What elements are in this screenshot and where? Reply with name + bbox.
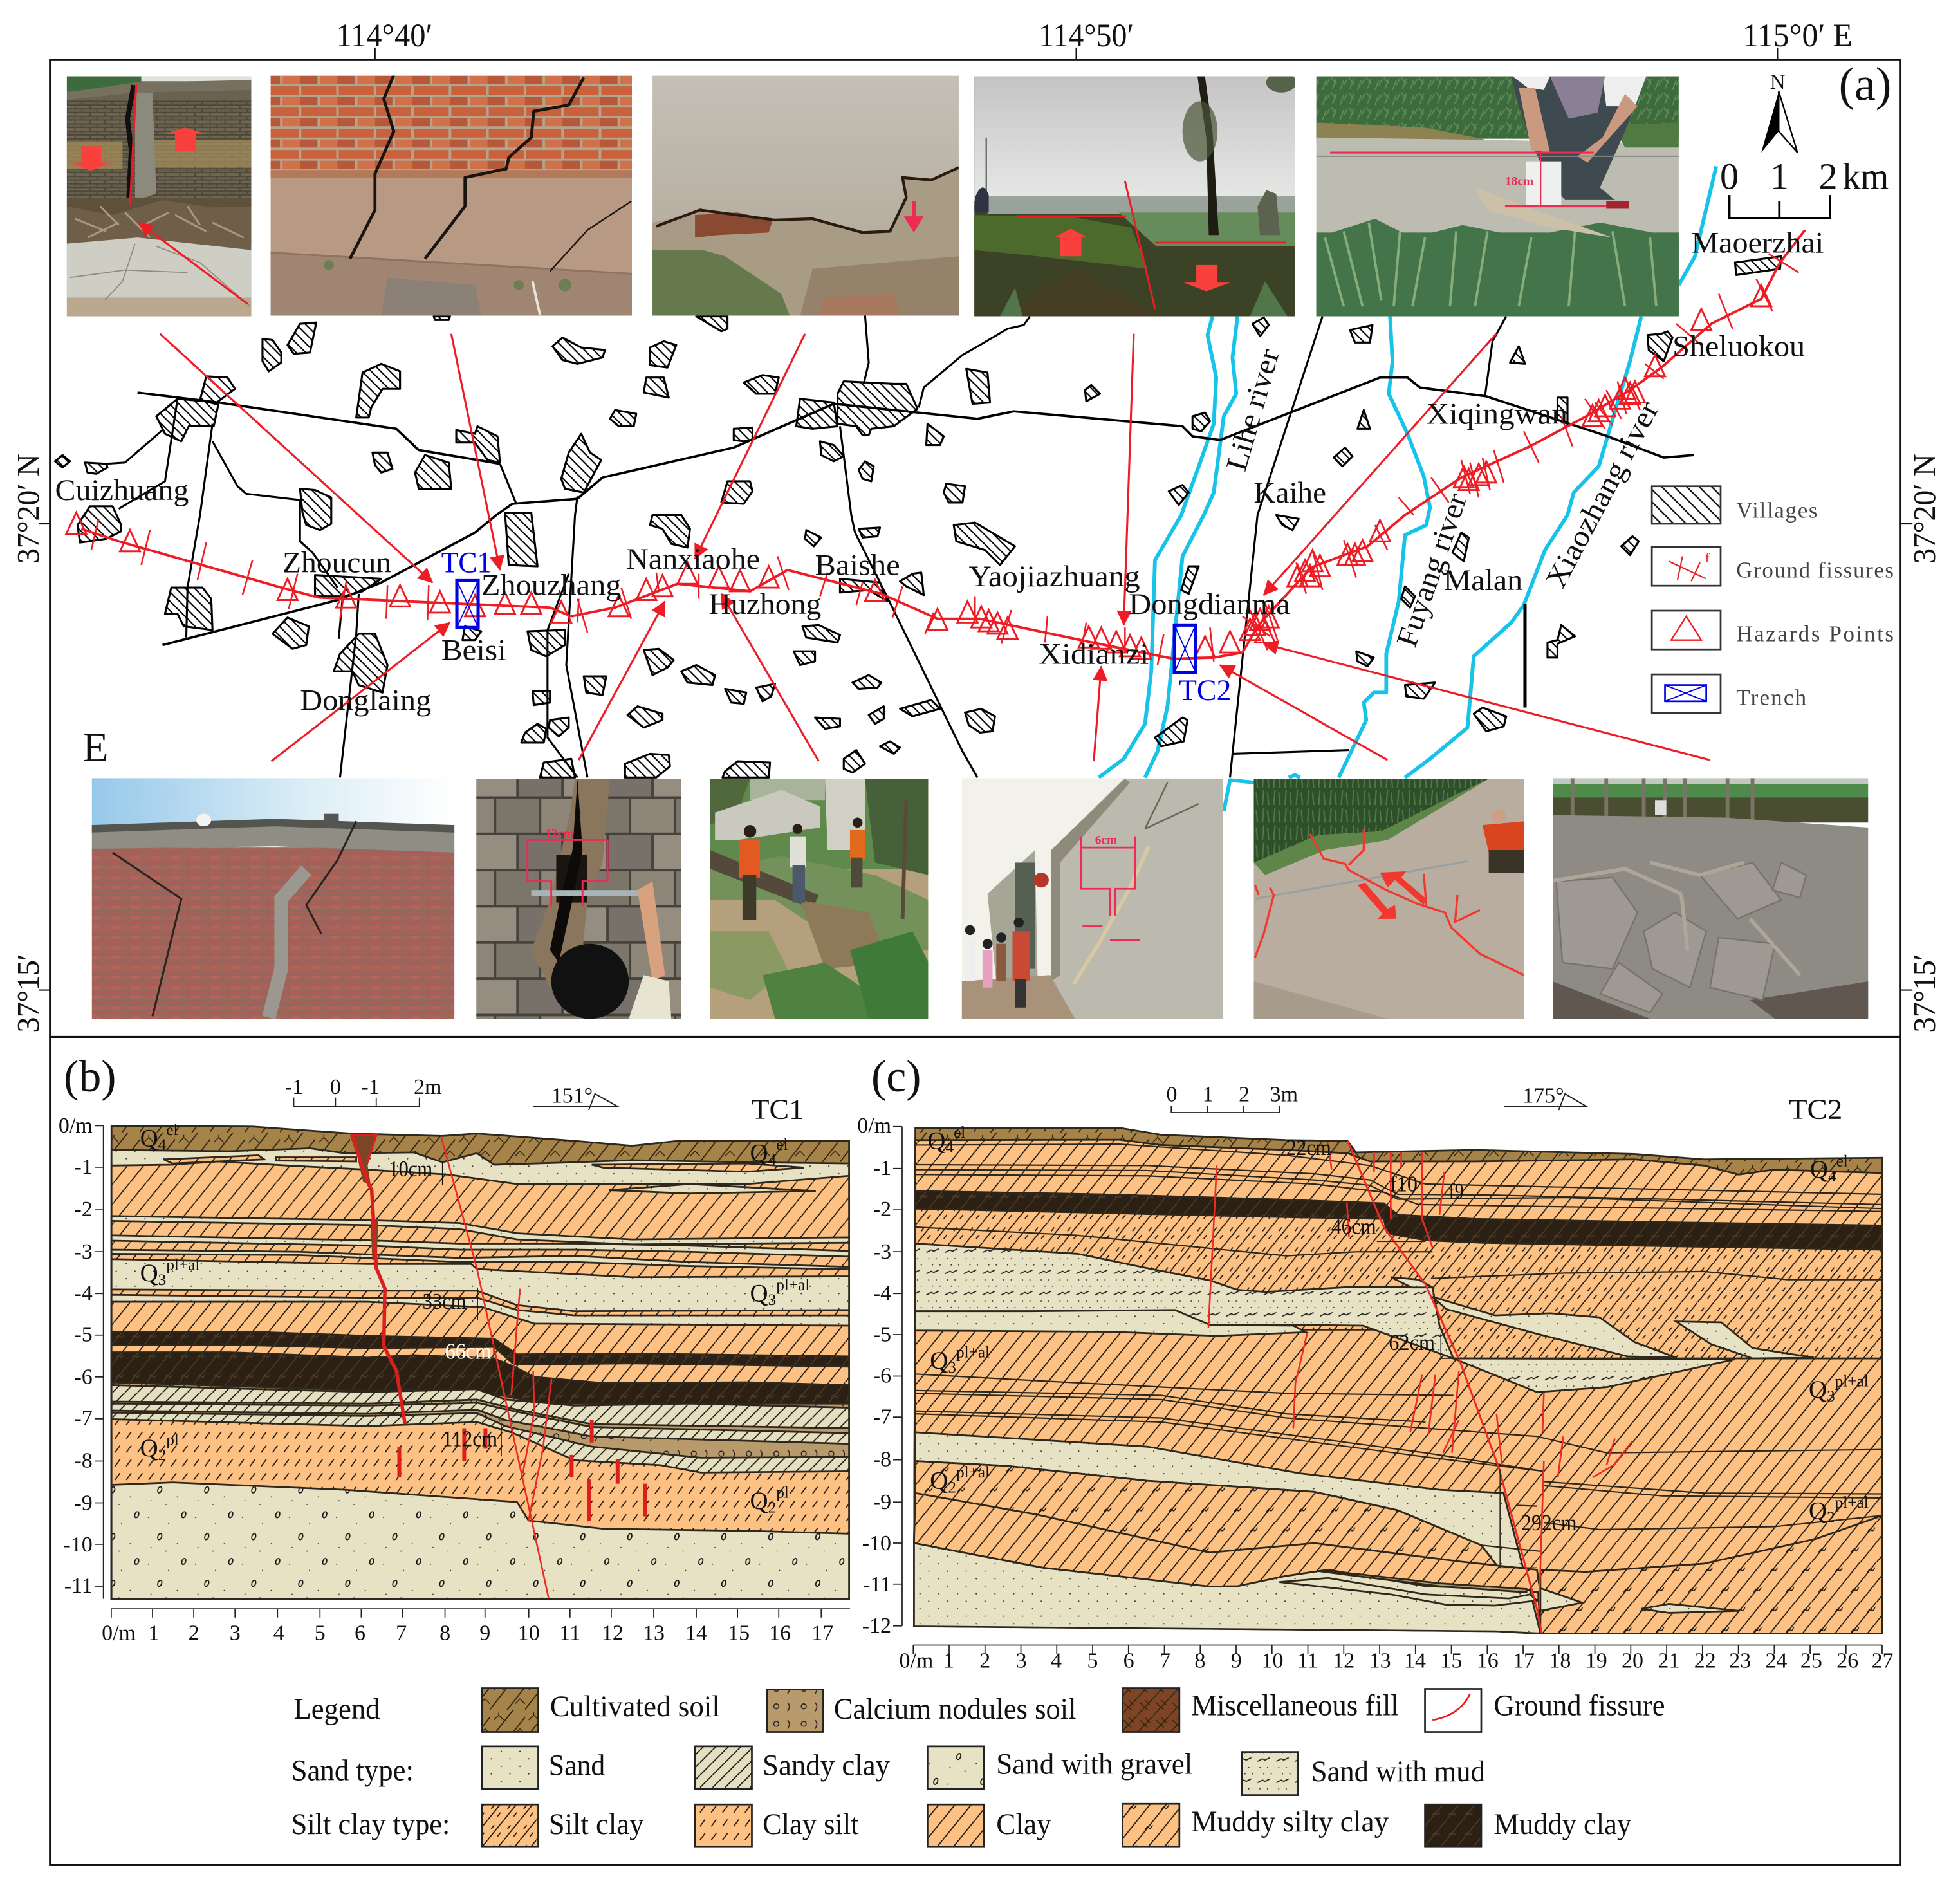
map place labels: Xiaozhang river — [1539, 395, 1666, 593]
longitude label 115°0′ E: 115°0′ E — [1743, 17, 1853, 53]
legend item clay silt: Clay silt — [763, 1808, 859, 1841]
TC1 distance axis: 17 — [811, 1622, 833, 1645]
TC2 distance axis: 16 — [1477, 1649, 1499, 1672]
TC1 scale bar: -1 — [361, 1075, 380, 1099]
heading TC1: TC1 — [752, 1093, 804, 1125]
legend item sand — [482, 1746, 605, 1789]
map legend: ground fissures: f — [1705, 550, 1710, 566]
TC2 distance axis: 12 — [1333, 1649, 1354, 1672]
map place labels: Malan — [1444, 564, 1522, 597]
TC2 scale bar: 2 — [1239, 1082, 1250, 1106]
map place labels — [55, 226, 1824, 717]
legend item ground fissure — [1425, 1689, 1665, 1732]
TC2 distance axis: 17 — [1513, 1649, 1535, 1672]
TC1 strata labels: el — [166, 1121, 178, 1139]
TC2 distance axis: 15 — [1440, 1649, 1462, 1672]
roads — [106, 315, 1694, 777]
map place labels: Yaojiazhuang — [969, 560, 1140, 593]
photo: wall with vertical crack — [67, 76, 251, 317]
km scale bar: km — [1842, 155, 1889, 197]
TC1 distance axis: 4 — [273, 1622, 284, 1645]
TC2 depth axis: -10 — [862, 1532, 891, 1555]
longitude label 114°50′: 114°50′ — [1039, 17, 1134, 53]
TC2 strata labels: 3 — [948, 1358, 956, 1376]
TC2 distance axis: 9 — [1231, 1649, 1242, 1672]
TC1 strata labels: pl+al — [166, 1256, 199, 1274]
TC2 strata labels: 4 — [1828, 1167, 1836, 1185]
legend item cultivated soil: Cultivated soil — [550, 1690, 720, 1723]
TC2 distance axis: 11 — [1297, 1649, 1318, 1672]
TC2 distance axis: 23 — [1729, 1649, 1751, 1672]
TC1 depth axis: -4 — [74, 1281, 93, 1305]
TC2 strata labels: el — [1836, 1152, 1848, 1170]
map place labels: Maoerzhai — [1691, 226, 1824, 259]
TC2 strata labels — [927, 1124, 1869, 1526]
TC2 scale bar — [1166, 1082, 1298, 1113]
TC1 distance axis: 6 — [355, 1622, 365, 1645]
legend item sand: Sand — [549, 1749, 605, 1782]
map legend: ground fissures — [1652, 547, 1894, 586]
TC2 distance axis — [899, 1645, 1894, 1672]
TC1 strata labels: Q — [140, 1124, 158, 1152]
km scale bar — [1720, 155, 1889, 218]
row label sand type: Sand type: — [291, 1754, 414, 1787]
map place labels: Zhoucun — [282, 546, 391, 580]
TC1 depth axis: -7 — [74, 1407, 93, 1430]
TC2 strata labels: Q — [1810, 1156, 1828, 1183]
TC1 depth axis — [59, 1114, 104, 1599]
TC1 strata labels: Q — [750, 1140, 768, 1167]
TC2 strata labels: pl+al — [1835, 1494, 1869, 1512]
TC2 distance axis: 26 — [1836, 1649, 1858, 1672]
TC1 distance axis: 15 — [728, 1622, 750, 1645]
TC2 depth axis: -6 — [873, 1364, 891, 1388]
map place labels: Beisi — [441, 634, 506, 667]
map place labels: Nanxiaohe — [626, 542, 760, 576]
TC2 distance axis: 20 — [1622, 1649, 1643, 1672]
TC2 depth axis: 0/m — [857, 1114, 891, 1138]
TC1 scale bar: -1 — [285, 1075, 303, 1099]
legend item miscellaneous fill — [1122, 1689, 1399, 1732]
TC1 strata labels: 3 — [768, 1291, 776, 1309]
TC2 depth axis: -5 — [873, 1322, 891, 1346]
TC2 distance axis: 3 — [1016, 1649, 1027, 1672]
map place labels: Sheluokou — [1672, 330, 1805, 364]
panel tag (c): (c) — [871, 1052, 921, 1102]
ground fissure trace with ticks — [81, 230, 1805, 665]
TC1 distance axis: 8 — [439, 1622, 450, 1645]
map place labels: Huzhong — [708, 588, 821, 621]
map place labels: TC2 — [1179, 674, 1231, 707]
TC2 distance axis: 27 — [1872, 1649, 1894, 1672]
TC1 depth axis: -10 — [63, 1533, 93, 1557]
TC1 strata labels: Q — [750, 1487, 768, 1515]
TC2 distance axis: 18 — [1549, 1649, 1571, 1672]
map legend: trench — [1652, 674, 1807, 713]
TC2 distance axis: 24 — [1765, 1649, 1787, 1672]
legend item sand with gravel — [927, 1746, 1192, 1789]
TC1 distance axis: 1 — [148, 1622, 159, 1645]
legend item miscellaneous fill: Miscellaneous fill — [1191, 1689, 1399, 1722]
photo: road with traced red fissures — [1253, 779, 1524, 1019]
TC1 strata labels: 3 — [158, 1271, 166, 1289]
TC1 depth axis: 0/m — [59, 1114, 93, 1138]
TC1 strata labels: 4 — [158, 1136, 167, 1154]
photo: block wall gap 12cm — [476, 779, 681, 1019]
letter E: E — [82, 724, 109, 771]
TC1 scale bar: 2m — [414, 1075, 441, 1099]
TC2 distance axis: 10 — [1262, 1649, 1284, 1672]
TC2 depth axis: -1 — [873, 1156, 891, 1180]
hazard point triangles — [66, 285, 1771, 659]
legend item silt clay: Silt clay — [549, 1808, 644, 1841]
TC2 strata labels: Q — [927, 1127, 945, 1154]
TC1 strata labels: pl — [776, 1483, 789, 1501]
legend item ground fissure: Ground fissure — [1493, 1689, 1665, 1722]
latitude label left 37°20′ N: 37°20′ N — [11, 454, 46, 564]
legend item sandy clay: Sandy clay — [763, 1749, 891, 1782]
legend item silt clay — [482, 1804, 644, 1847]
map place labels: Xiqingwan — [1427, 398, 1567, 431]
trench log TC1 strata — [111, 1125, 849, 1599]
TC1 displacement labels: 33cm — [423, 1289, 467, 1314]
latitude label right 37°15′: 37°15′ — [1907, 954, 1942, 1033]
TC2 strata labels: pl+al — [956, 1344, 990, 1362]
TC2 distance axis: 8 — [1194, 1649, 1205, 1672]
TC2 strata labels: el — [954, 1124, 965, 1142]
TC2 strata labels: Q — [1809, 1376, 1827, 1403]
legend item sand with gravel: Sand with gravel — [996, 1748, 1192, 1781]
photo: house wall crack 6cm — [961, 778, 1223, 1019]
north arrow: N — [1770, 71, 1786, 94]
TC1 strata labels: pl — [166, 1431, 179, 1449]
TC2 displacement labels — [1286, 1135, 1577, 1535]
TC1 strata labels: 2 — [158, 1446, 166, 1464]
TC2 displacement labels: 62cm — [1389, 1330, 1435, 1355]
TC2 distance axis: 4 — [1051, 1649, 1062, 1672]
TC2 strata labels: 3 — [1827, 1387, 1835, 1405]
km scale bar: 1 — [1770, 155, 1789, 197]
TC2 depth axis — [857, 1114, 902, 1638]
TC2 distance axis: 13 — [1369, 1649, 1391, 1672]
TC2 scale bar: 1 — [1203, 1082, 1214, 1106]
map legend: ground fissures: Ground fissures — [1736, 558, 1894, 583]
TC1 depth axis: -8 — [74, 1449, 93, 1473]
TC2 orientation 175°: 175° — [1522, 1084, 1564, 1107]
TC1 distance axis: 13 — [643, 1622, 665, 1645]
TC1 distance axis: 0/m — [102, 1622, 136, 1645]
TC2 distance axis: 2 — [979, 1649, 990, 1672]
photo: brick wall with stepped cracks — [270, 76, 632, 315]
photo: measuring road offset 18cm: 18cm — [1505, 175, 1533, 189]
TC2 distance axis: 21 — [1658, 1649, 1679, 1672]
TC1 displacement labels: 112cm — [443, 1427, 497, 1452]
legend item cultivated soil — [482, 1689, 720, 1732]
legend item muddy silty clay — [1122, 1804, 1389, 1847]
photo: broken road surface — [1553, 778, 1869, 1019]
TC1 depth axis: -2 — [74, 1198, 93, 1221]
legend item muddy clay: Muddy clay — [1493, 1808, 1632, 1841]
map place labels: Baishe — [815, 549, 900, 582]
TC2 distance axis: 25 — [1800, 1649, 1822, 1672]
TC1 orientation 151°: 151° — [551, 1084, 593, 1107]
TC1 depth axis: -6 — [74, 1365, 93, 1389]
legend item clay — [927, 1804, 1051, 1847]
TC1 strata labels: el — [776, 1136, 788, 1154]
TC2 depth axis: -7 — [873, 1405, 891, 1429]
north arrow — [1761, 71, 1797, 153]
map legend: villages: Villages — [1736, 497, 1818, 523]
TC2 distance axis: 7 — [1160, 1649, 1170, 1672]
panel tag (a): (a) — [1839, 57, 1891, 110]
TC1 distance axis: 9 — [479, 1622, 490, 1645]
TC1 distance axis: 11 — [559, 1622, 580, 1645]
TC1 displacement labels: 10cm — [389, 1156, 432, 1181]
photo: house wall crack 6cm: 6cm — [1095, 833, 1117, 847]
TC1 distance axis — [102, 1609, 850, 1645]
latitude label left 37°15′: 37°15′ — [11, 954, 46, 1033]
TC2 depth axis: -9 — [873, 1490, 891, 1514]
latitude label right 37°20′ N: 37°20′ N — [1907, 454, 1942, 564]
legend item sand with mud: Sand with mud — [1311, 1755, 1485, 1788]
legend item sandy clay — [695, 1746, 891, 1789]
TC1 strata labels: Q — [750, 1279, 768, 1307]
map place labels: Zhouzhang — [481, 569, 621, 602]
TC2 strata labels: 2 — [1827, 1508, 1835, 1526]
photo: people at ditch — [710, 779, 928, 1019]
map place labels: TC1 — [441, 546, 491, 580]
TC2 scale bar: 3m — [1270, 1082, 1298, 1106]
TC1 depth axis: -1 — [74, 1155, 93, 1179]
legend item clay: Clay — [996, 1808, 1051, 1841]
TC1 displacement labels — [389, 1156, 501, 1456]
rivers — [1099, 166, 1716, 811]
map place labels: Fuyang river — [1390, 488, 1474, 651]
TC2 displacement labels: 22cm — [1286, 1135, 1331, 1160]
TC2 depth axis: -12 — [862, 1614, 891, 1638]
heading TC2: TC2 — [1789, 1093, 1842, 1125]
trench TC1 marker — [457, 580, 478, 627]
TC2 distance axis: 22 — [1694, 1649, 1716, 1672]
TC2 strata labels: Q — [930, 1347, 948, 1374]
map place labels: Donglaing — [300, 683, 431, 717]
TC2 ground fissures — [1208, 1141, 1632, 1633]
legend item sand with mud — [1242, 1752, 1485, 1795]
TC1 displacement labels: 66cm — [445, 1339, 491, 1364]
TC2 strata labels: pl+al — [956, 1463, 990, 1481]
TC2 strata labels: Q — [930, 1467, 948, 1495]
TC2 distance axis: 14 — [1404, 1649, 1426, 1672]
TC1 distance axis: 14 — [685, 1622, 707, 1645]
TC1 distance axis: 2 — [189, 1622, 199, 1645]
TC1 scale bar — [285, 1075, 441, 1106]
photo: plastered wall with horizontal crack — [652, 76, 959, 315]
TC1 depth axis: -5 — [74, 1322, 93, 1346]
TC1 orientation 151° — [533, 1084, 618, 1110]
TC1 distance axis: 5 — [315, 1622, 326, 1645]
map legend: hazards points — [1652, 611, 1894, 649]
TC1 strata labels: pl+al — [776, 1276, 809, 1294]
map place labels: Lihe river — [1219, 345, 1286, 474]
photo: measuring road offset 18cm — [1317, 76, 1679, 317]
TC1 strata labels: Q — [140, 1259, 158, 1287]
TC2 strata labels: pl+al — [1835, 1372, 1869, 1390]
trench TC2 marker — [1174, 625, 1196, 672]
TC2 distance axis: 19 — [1586, 1649, 1607, 1672]
photo: block wall gap 12cm: 12cm — [545, 828, 573, 841]
TC2 depth axis: -8 — [873, 1448, 891, 1472]
TC2 orientation 175° — [1504, 1084, 1586, 1110]
map place labels: Dongdianma — [1129, 588, 1290, 621]
legend item muddy silty clay: Muddy silty clay — [1191, 1805, 1389, 1838]
TC1 distance axis: 12 — [602, 1622, 624, 1645]
TC1 distance axis: 7 — [396, 1622, 407, 1645]
TC2 depth axis: -4 — [873, 1281, 891, 1305]
TC1 depth axis: -9 — [74, 1492, 93, 1515]
trench log TC2 strata — [911, 1128, 1882, 1634]
legend item clay silt — [695, 1804, 859, 1847]
TC2 strata labels: Q — [1809, 1497, 1827, 1524]
legend title: Legend — [294, 1692, 380, 1726]
km scale bar: 0 — [1720, 155, 1739, 197]
TC1 ground fissures — [351, 1134, 645, 1598]
photo: field scarp with offset lines — [974, 76, 1295, 317]
TC1 strata labels: 2 — [768, 1499, 776, 1517]
TC1 distance axis: 16 — [769, 1622, 791, 1645]
legend item muddy clay — [1425, 1804, 1632, 1847]
TC1 strata labels — [140, 1121, 809, 1517]
arrows from photos to fissure sites — [160, 334, 1710, 761]
map place labels: Kaihe — [1253, 476, 1326, 510]
panel tag (b): (b) — [64, 1052, 116, 1102]
TC2 distance axis: 1 — [943, 1649, 954, 1672]
TC2 scale bar: 0 — [1166, 1082, 1177, 1106]
TC2 displacement labels: f9 — [1448, 1179, 1464, 1204]
TC1 strata labels: Q — [140, 1434, 158, 1462]
villages — [55, 256, 1781, 777]
map legend: trench: Trench — [1736, 685, 1807, 710]
legend item calcium nodules soil: Calcium nodules soil — [834, 1692, 1077, 1726]
TC1 distance axis: 3 — [230, 1622, 241, 1645]
map place labels: Cuizhuang — [55, 474, 189, 507]
legend item calcium nodules soil — [767, 1689, 1077, 1732]
photo: brick house wall crack — [91, 778, 454, 1019]
TC2 depth axis: -3 — [873, 1240, 891, 1264]
TC1 distance axis: 10 — [518, 1622, 540, 1645]
TC2 distance axis: 5 — [1087, 1649, 1098, 1672]
TC1 strata labels: 4 — [768, 1151, 777, 1169]
TC2 depth axis: -2 — [873, 1198, 891, 1221]
TC2 distance axis: 6 — [1123, 1649, 1134, 1672]
map place labels: Xidianzi — [1039, 638, 1149, 671]
TC2 displacement labels: 46cm — [1331, 1214, 1376, 1239]
TC2 distance axis: 0/m — [899, 1649, 933, 1672]
km scale bar: 2 — [1818, 155, 1838, 197]
map legend: villages — [1652, 486, 1818, 524]
TC2 depth axis: -11 — [863, 1573, 891, 1596]
TC1 depth axis: -3 — [74, 1240, 93, 1264]
TC2 displacement labels: 292cm — [1521, 1510, 1577, 1535]
TC1 scale bar: 0 — [330, 1075, 341, 1099]
TC2 strata labels: 2 — [948, 1479, 956, 1497]
TC2 strata labels: 4 — [945, 1138, 954, 1156]
TC2 displacement labels: f10 — [1390, 1171, 1418, 1196]
row label silt clay type: Silt clay type: — [291, 1808, 450, 1841]
longitude label 114°40′: 114°40′ — [337, 17, 432, 53]
TC1 depth axis: -11 — [64, 1574, 93, 1598]
map legend: hazards points: Hazards Points — [1736, 622, 1894, 647]
